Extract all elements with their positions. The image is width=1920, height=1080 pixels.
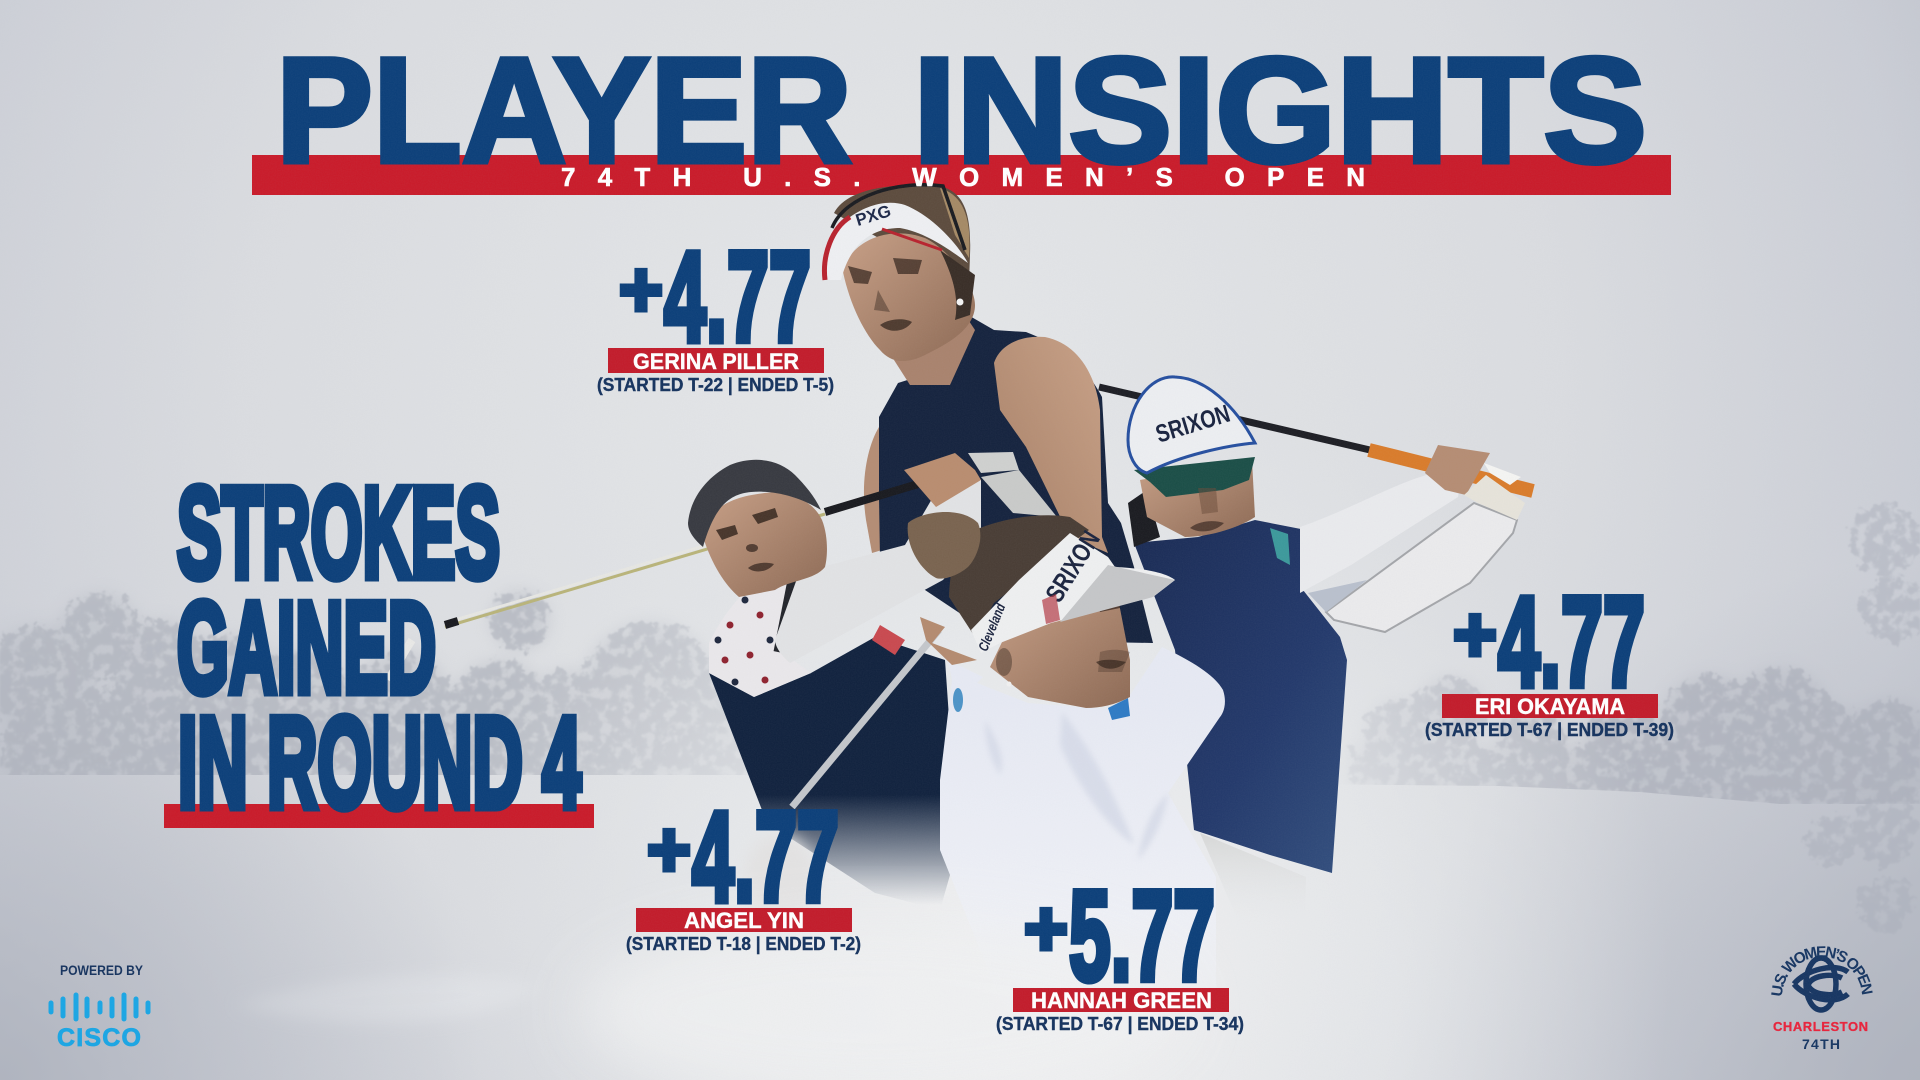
stat: Hannah Green: 5.77 bbox=[1069, 865, 1215, 1008]
logo: U.S. Women's Open Charleston: CHARLESTON bbox=[1773, 1019, 1868, 1034]
subtitle: 74TH U.S. WOMEN’S OPEN bbox=[561, 162, 1365, 192]
title: PLAYER bbox=[276, 26, 852, 194]
stat: Gerina Piller: + bbox=[619, 245, 663, 333]
stat: Angel Yin: 4.77 bbox=[692, 786, 839, 929]
stat: Gerina Piller bbox=[597, 226, 834, 395]
stat: Eri Okayama: + bbox=[1453, 590, 1497, 678]
heading: strokes gained in round 4: IN ROUND 4 bbox=[178, 691, 581, 835]
fog over golfers' lower bodies bbox=[580, 920, 1180, 1080]
stat: Gerina Piller: GERINA PILLER bbox=[633, 349, 799, 374]
shirt folds bbox=[985, 712, 1168, 860]
golfer: Hannah Green: SRIXON bbox=[1039, 525, 1106, 607]
stat: Angel Yin: (STARTED T-18 | ENDED T-2) bbox=[626, 934, 861, 954]
golfer: Eri Okayama bbox=[1128, 377, 1525, 925]
golf club: Hannah Green bbox=[792, 630, 939, 807]
golf club: Eri Okayama bbox=[1099, 387, 1533, 491]
club head fading behind Angel Yin's number bbox=[744, 834, 816, 926]
heading: strokes gained in round 4: GAINED bbox=[177, 576, 436, 720]
logo: U.S. Women's Open Charleston: U.S. WOMEN’S OPEN bbox=[1771, 946, 1873, 996]
logo: U.S. Women's Open Charleston: 74TH bbox=[1802, 1036, 1840, 1052]
stat: Hannah Green: + bbox=[1024, 884, 1068, 972]
stat: Hannah Green: (STARTED T-67 | ENDED T-34) bbox=[996, 1014, 1244, 1034]
heading: strokes gained in round 4 bbox=[164, 461, 594, 835]
stat: Gerina Piller: (STARTED T-22 | ENDED T-5) bbox=[597, 375, 834, 395]
golfer: Gerina Piller bbox=[824, 185, 1153, 643]
golfer: Eri Okayama: SRIXON bbox=[1152, 400, 1233, 449]
green contour on fairway bbox=[235, 975, 540, 1023]
stat: Eri Okayama: ERI OKAYAMA bbox=[1475, 694, 1625, 719]
stat: Angel Yin: + bbox=[647, 805, 691, 893]
logo: powered by Cisco bbox=[51, 963, 148, 1052]
near arm bbox=[1300, 472, 1460, 593]
golfer group bbox=[388, 185, 1533, 1080]
stat: Eri Okayama: (STARTED T-67 | ENDED T-39) bbox=[1425, 720, 1674, 740]
golfer: Gerina Piller: PXG bbox=[853, 201, 893, 230]
face features bbox=[848, 258, 922, 331]
stat: Hannah Green: HANNAH GREEN bbox=[1031, 988, 1212, 1013]
golfer: Hannah Green: Cleveland bbox=[975, 601, 1008, 653]
title: INSIGHTS bbox=[913, 26, 1647, 194]
far arm bbox=[1326, 503, 1517, 632]
stat: Eri Okayama: 4.77 bbox=[1498, 571, 1645, 714]
golfer: Angel Yin bbox=[688, 460, 981, 910]
logo: powered by Cisco: CISCO bbox=[57, 1024, 141, 1052]
golfer: Hannah Green bbox=[908, 512, 1225, 1080]
golf club: Angel Yin bbox=[388, 484, 918, 680]
logo: U.S. Women's Open Charleston bbox=[1771, 946, 1873, 1052]
overhanging foliage far right bbox=[1804, 504, 1920, 933]
stat: Hannah Green bbox=[996, 865, 1244, 1034]
title red bar bbox=[252, 155, 1671, 195]
stat: Angel Yin: ANGEL YIN bbox=[684, 908, 804, 933]
stat: Eri Okayama bbox=[1425, 571, 1674, 740]
logo: powered by Cisco: POWERED BY bbox=[60, 963, 143, 978]
heading: strokes gained in round 4: STROKES bbox=[177, 461, 500, 605]
hands and glove: Gerina Piller bbox=[904, 452, 1057, 517]
stat: Gerina Piller: 4.77 bbox=[664, 226, 811, 369]
stat: Angel Yin bbox=[626, 786, 861, 954]
title bbox=[276, 26, 1647, 194]
tree silhouettes right bbox=[1350, 668, 1920, 805]
tree silhouettes left bbox=[0, 590, 760, 780]
